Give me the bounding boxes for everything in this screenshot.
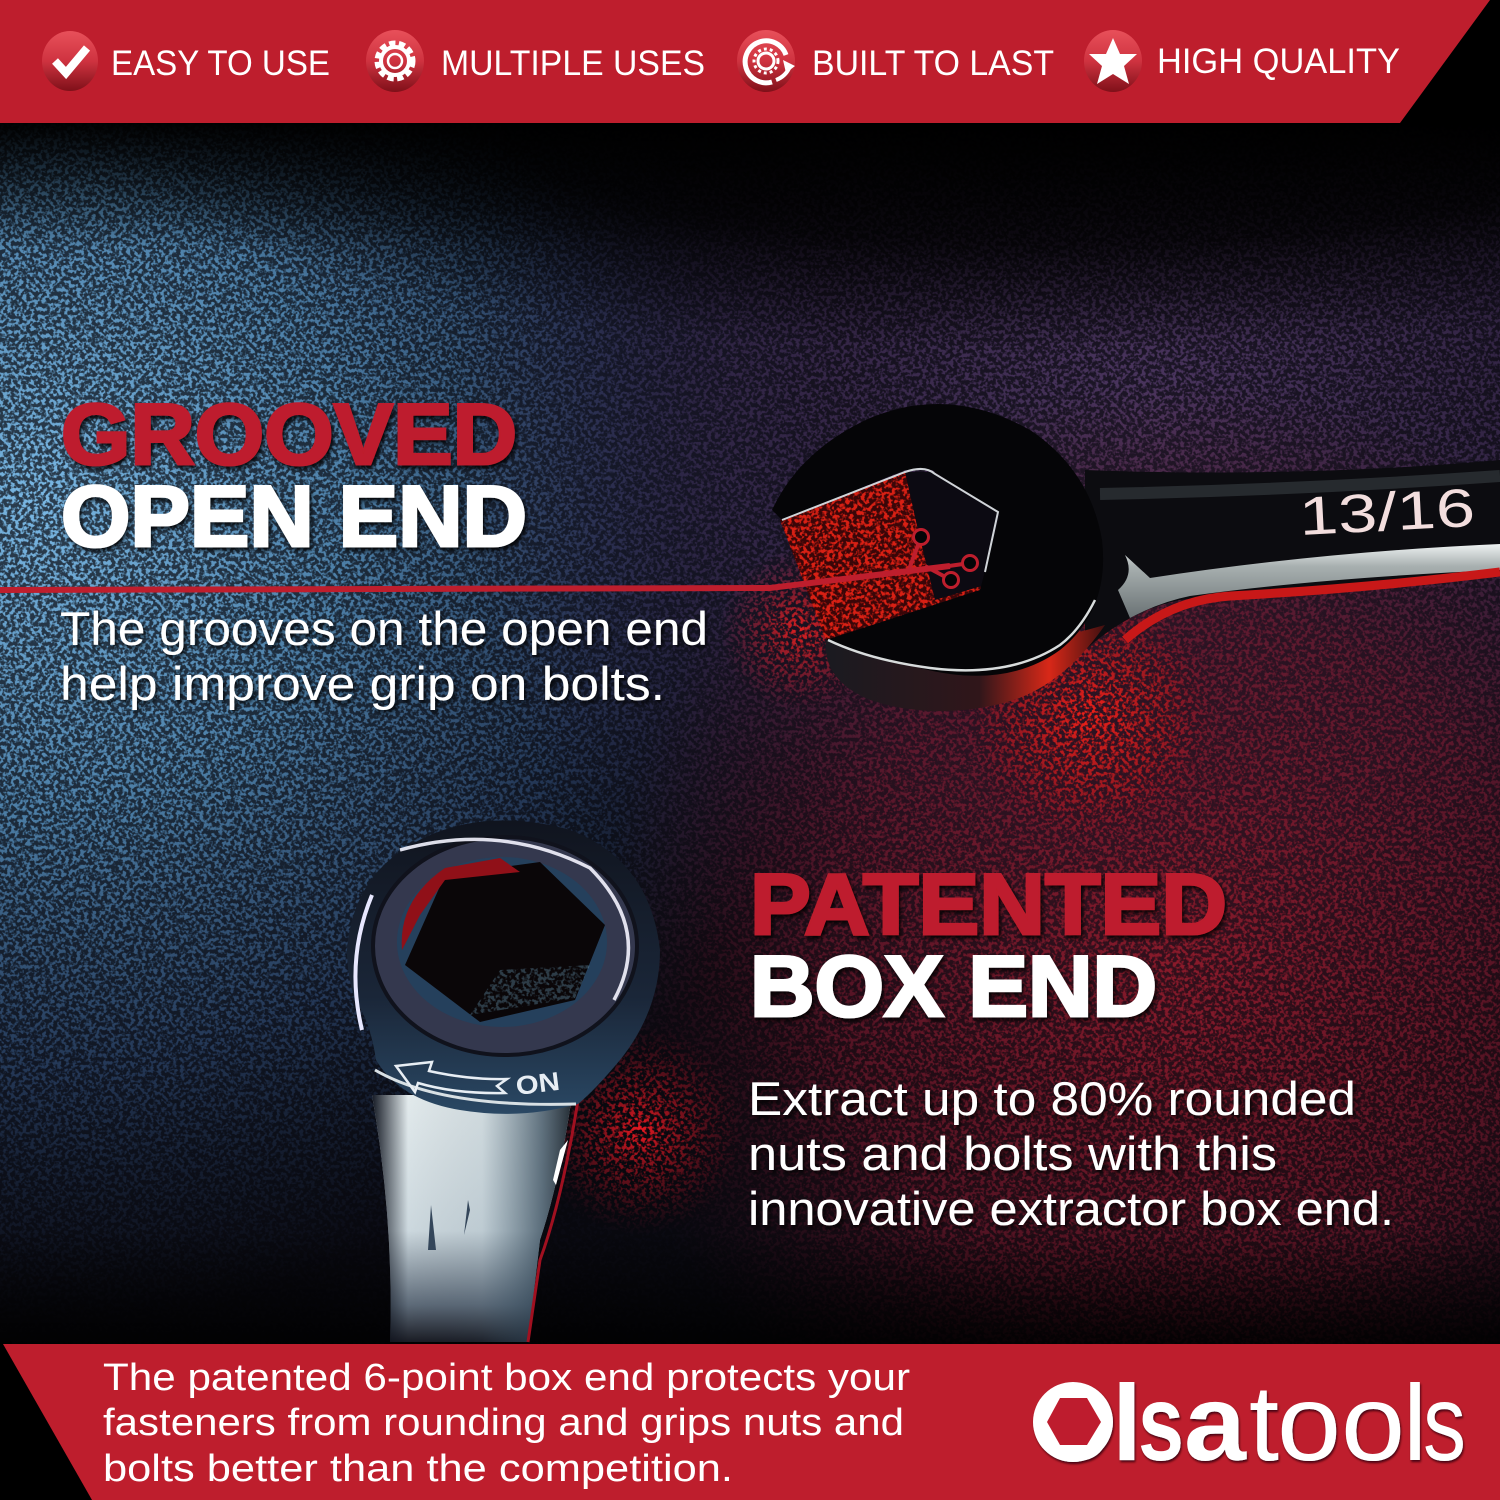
- wrench size marking: 13/16: [1297, 478, 1476, 547]
- wrench inner ring: [373, 837, 637, 1055]
- fabric seen through hole: [470, 965, 590, 1015]
- badge: built to last: [737, 30, 1054, 92]
- heading: grooved open end: [61, 387, 527, 565]
- text block: box end description: innovative extractor box end.: [748, 1182, 1394, 1235]
- red glint in hole: [402, 858, 520, 950]
- icon: star button: [1084, 30, 1142, 92]
- open end wrench: [772, 404, 1500, 711]
- wrench outer highlight: [355, 895, 372, 1030]
- text block: patented summary: [103, 1357, 910, 1490]
- text block: patented summary: fasteners from rounding and grips nuts and: [103, 1402, 904, 1444]
- bottom red banner: [3, 1344, 1500, 1500]
- wrench head side: [826, 625, 1105, 711]
- wrench ring head: [347, 820, 660, 1114]
- heading: patented box end: BOX END: [750, 939, 1157, 1035]
- wrench handle: [1085, 460, 1500, 650]
- label: easy to use: EASY TO USE: [111, 44, 330, 83]
- text block: box end description: [748, 1072, 1394, 1235]
- icon: check button: [42, 31, 98, 91]
- icon: renewal gear button: [737, 30, 795, 92]
- logo: Olsatools: [1033, 1362, 1466, 1483]
- logo: Olsatools: O: [1042, 1380, 1112, 1480]
- badge: multiple uses: [366, 30, 705, 92]
- text block: patented summary: The patented 6-point box end protects your: [103, 1357, 910, 1399]
- badge: easy to use: [42, 31, 330, 91]
- logo: Olsatools: t: [1249, 1362, 1279, 1483]
- heading: grooved open end: GROOVED: [61, 387, 517, 483]
- wrench ring light edge: [400, 839, 628, 1000]
- wrench shank: [372, 1095, 578, 1342]
- text block: patented summary: bolts better than the competition.: [103, 1448, 733, 1490]
- text block: open end description: [60, 602, 708, 710]
- text block: box end description: nuts and bolts with this: [748, 1127, 1277, 1180]
- heading: patented box end: [750, 857, 1227, 1035]
- label: high quality: HIGH QUALITY: [1157, 42, 1400, 81]
- logo: Olsatools: s: [1423, 1362, 1466, 1483]
- logo: Olsatools: o: [1341, 1362, 1405, 1483]
- arrow engraving: [396, 1062, 507, 1093]
- ON engraving: ON: [514, 1066, 561, 1101]
- logo: Olsatools: a: [1184, 1362, 1247, 1483]
- wrench jaw opening with red fabric: [780, 472, 1002, 640]
- text block: box end description: Extract up to 80% rounded: [748, 1072, 1356, 1125]
- icon: gear button: [366, 30, 424, 92]
- callout pointer line to grooves: [0, 530, 978, 590]
- logo: Olsatools: o: [1277, 1362, 1341, 1483]
- wrench round bore: [397, 857, 607, 1027]
- top red banner: [0, 0, 1490, 123]
- logo: Olsatools: l: [1403, 1362, 1427, 1483]
- text block: open end description: The grooves on the open end: [60, 602, 708, 655]
- wrench head face: [772, 404, 1103, 676]
- logo: Olsatools: l: [1112, 1362, 1142, 1483]
- logo: Olsatools: s: [1138, 1362, 1184, 1483]
- heading: patented box end: PATENTED: [750, 857, 1227, 953]
- badge: high quality: [1084, 30, 1400, 92]
- wrench hexagonal hole: [405, 862, 605, 1022]
- label: built to last: BUILT TO LAST: [812, 44, 1054, 83]
- heading: grooved open end: OPEN END: [61, 469, 527, 565]
- text block: open end description: help improve grip on bolts.: [60, 657, 665, 710]
- box end ratcheting wrench: [347, 820, 660, 1342]
- label: multiple uses: MULTIPLE USES: [441, 44, 705, 83]
